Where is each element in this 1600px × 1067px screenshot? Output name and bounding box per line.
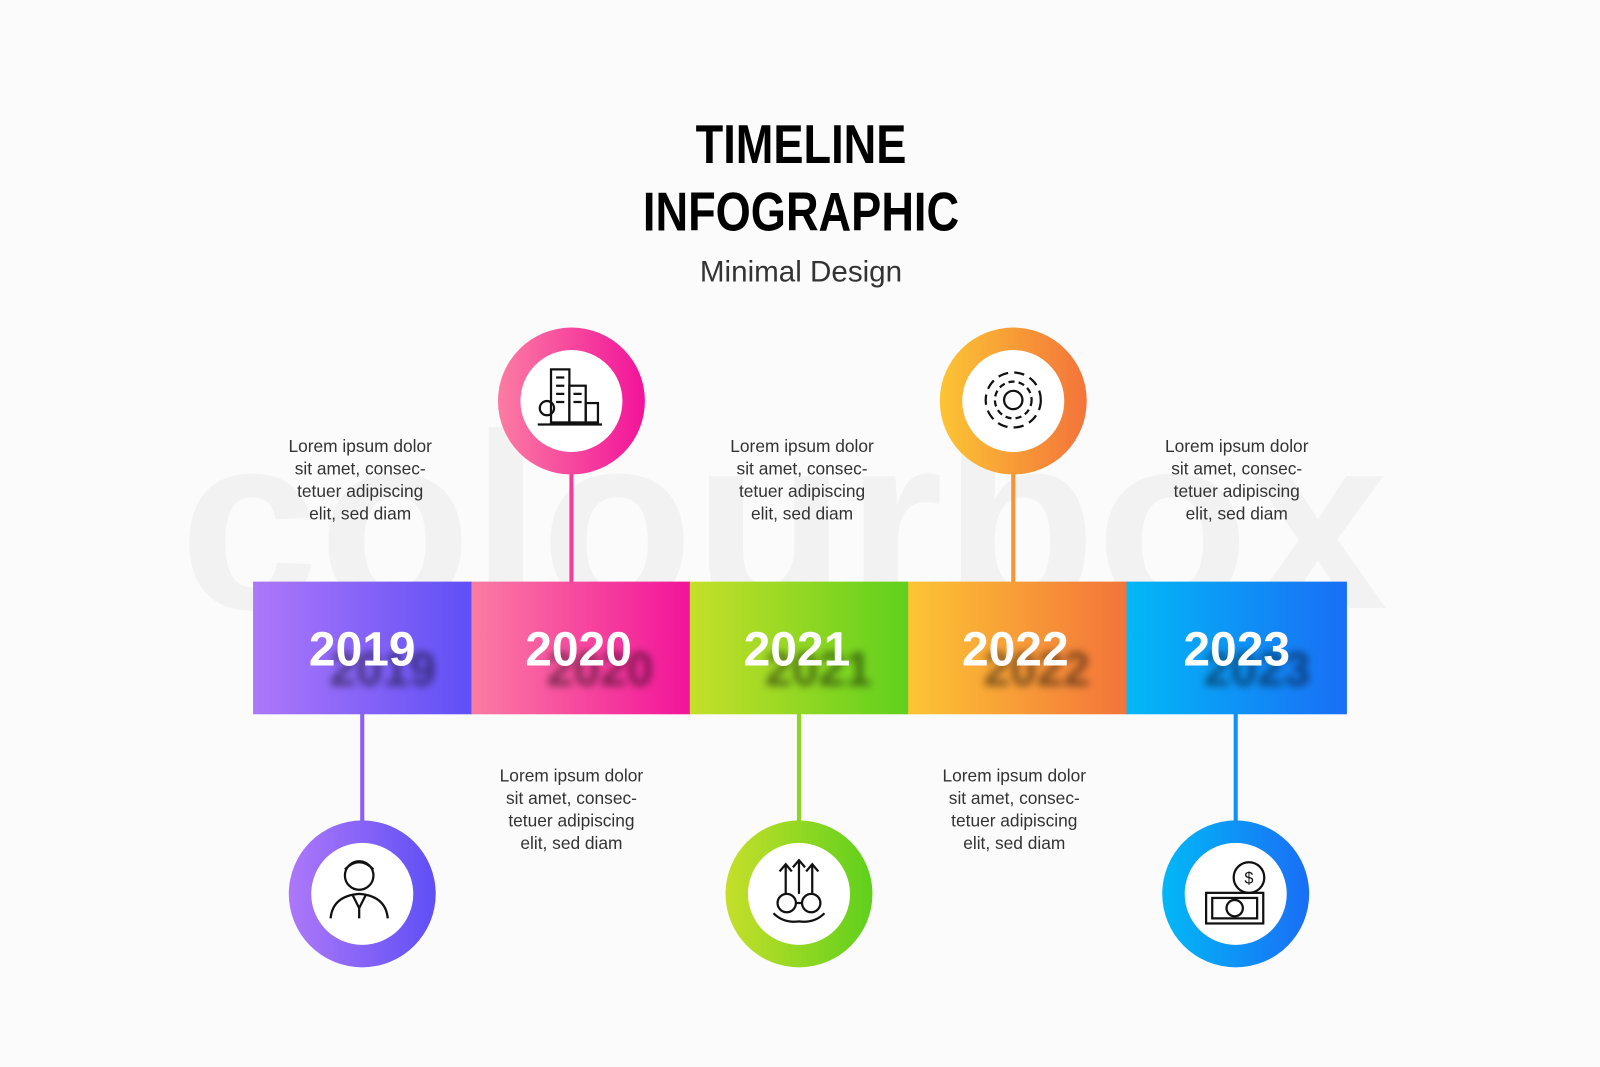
descriptions: tetuer adipiscing [739,481,865,501]
connector lines [362,449,1236,847]
descriptions: Lorem ipsum dolor [943,766,1086,786]
descriptions: tetuer adipiscing [508,811,635,831]
descriptions: Lorem ipsum dolor [500,766,643,786]
descriptions: elit, sed diam [963,833,1065,853]
timeline bar: 2023 [1204,644,1310,697]
timeline bar: 2021 [765,644,872,697]
descriptions [288,436,1309,853]
descriptions: sit amet, consec- [949,788,1080,808]
timeline bar: 2020 [547,644,653,697]
descriptions: tetuer adipiscing [1174,481,1300,501]
icons: $ [1244,870,1254,888]
timeline bar: 2019 [329,644,436,697]
watermark: colourbox [180,382,1388,661]
timeline bar: 2022 [962,623,1069,676]
descriptions: Lorem ipsum dolor [1165,436,1308,456]
title: TIMELINE [696,113,906,175]
descriptions: elit, sed diam [1186,503,1288,523]
descriptions: elit, sed diam [520,833,622,853]
title: Minimal Design [700,256,902,289]
descriptions: sit amet, consec- [506,788,637,808]
descriptions: tetuer adipiscing [951,811,1077,831]
descriptions: sit amet, consec- [295,458,426,478]
circles [289,328,1309,967]
timeline bar [253,582,1347,714]
timeline bar: 2023 [1183,623,1290,676]
timeline bar: 2020 [525,623,632,676]
title [643,113,959,289]
timeline bar: 2022 [983,644,1090,697]
title: INFOGRAPHIC [643,180,959,243]
descriptions: elit, sed diam [309,503,411,523]
descriptions: sit amet, consec- [1171,458,1302,478]
timeline bar: 2019 [309,623,416,676]
descriptions: Lorem ipsum dolor [730,436,874,456]
timeline bar: 2021 [744,623,850,676]
descriptions: Lorem ipsum dolor [288,436,432,456]
descriptions: sit amet, consec- [737,458,868,478]
icons [331,369,1264,923]
descriptions: tetuer adipiscing [297,481,423,501]
descriptions: elit, sed diam [751,503,853,523]
